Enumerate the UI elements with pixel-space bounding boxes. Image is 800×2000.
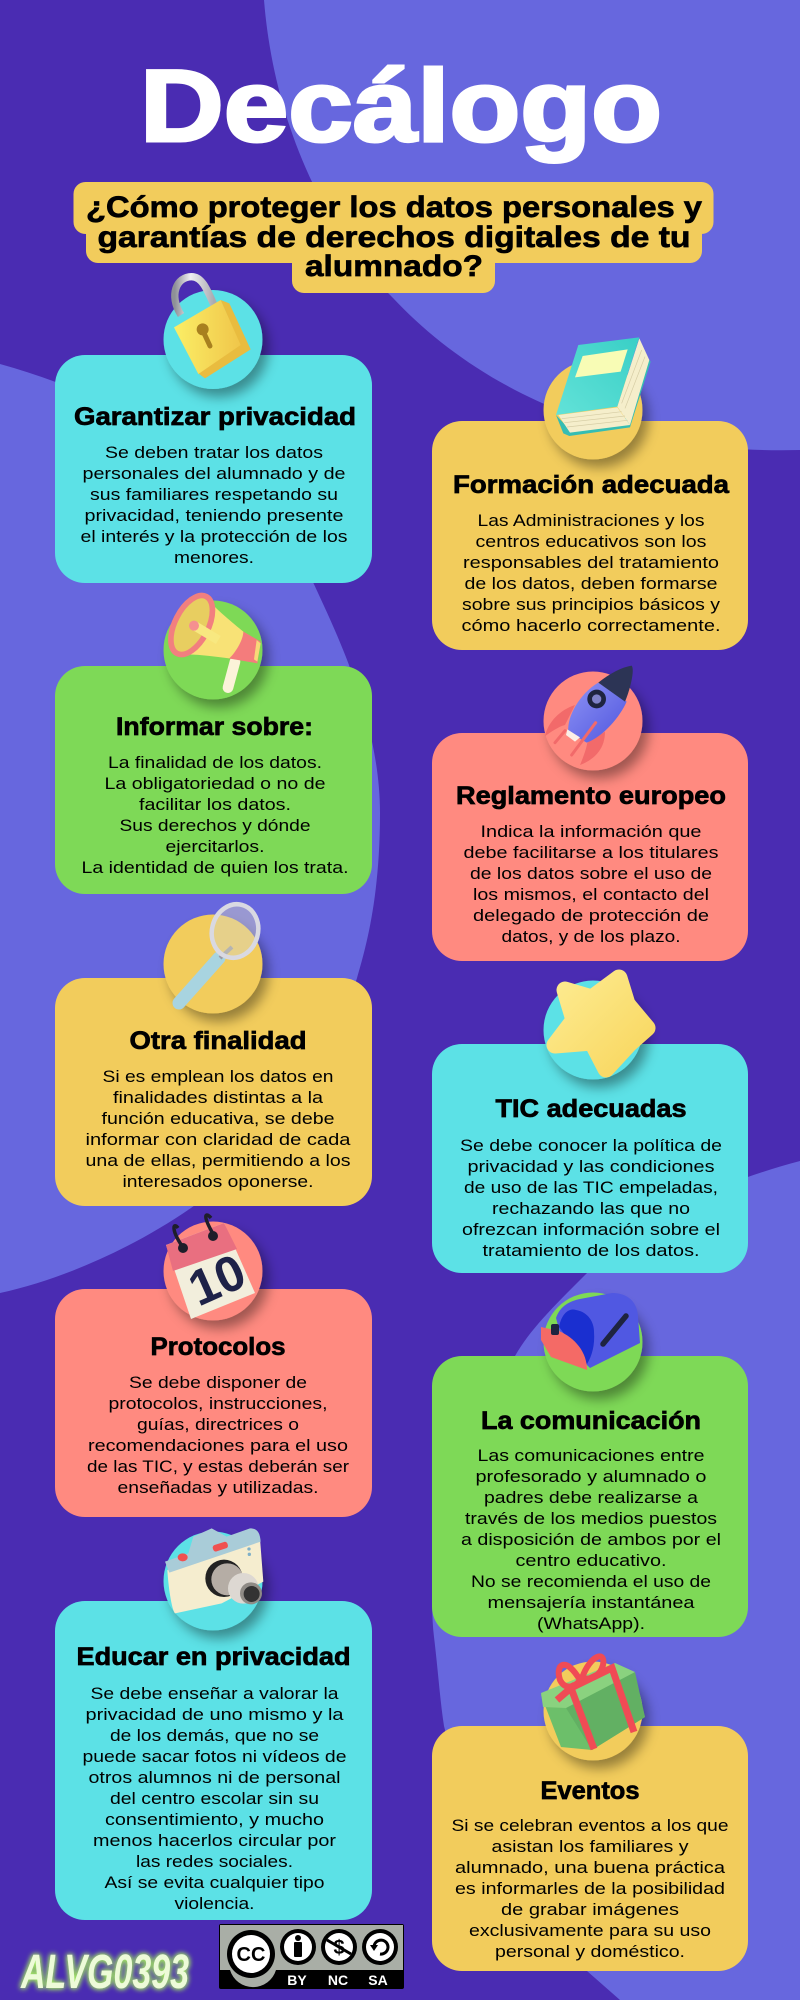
text block: Si es emplean los datos en <box>102 1067 334 1086</box>
text block <box>82 753 348 877</box>
text block: Sus derechos y dónde <box>120 816 310 835</box>
text block <box>462 511 721 635</box>
text block: el interés y la protección de los <box>80 527 348 546</box>
icon: rocket <box>544 666 642 770</box>
creative commons license badge: CC <box>237 1944 265 1966</box>
creative commons license badge <box>219 1924 404 1989</box>
text block: menos hacerlos circular por <box>93 1831 336 1850</box>
text block: Se debe conocer la política de <box>460 1136 722 1155</box>
text block: de los datos, deben formarse <box>464 574 718 593</box>
text block: delegado de protección de <box>473 906 709 925</box>
text block: interesados oponerse. <box>122 1172 314 1191</box>
heading: Reglamento europeo <box>456 782 726 810</box>
text block <box>86 1067 351 1191</box>
text block: Se deben tratar los datos <box>105 443 323 462</box>
text block: rechazando las que no <box>492 1199 690 1218</box>
text block <box>460 1136 722 1260</box>
subtitle: alumnado? <box>305 250 483 283</box>
text block: sobre sus principios básicos y <box>462 595 721 614</box>
text block: del centro escolar sin su <box>110 1789 319 1808</box>
text block: No se recomienda el uso de <box>471 1572 711 1591</box>
text block <box>87 1373 349 1497</box>
text block: privacidad, teniendo presente <box>84 506 344 525</box>
text block: de los datos sobre el uso de <box>470 864 712 883</box>
text block: informar con claridad de cada <box>86 1130 351 1149</box>
heading: Eventos <box>540 1777 640 1805</box>
text block: privacidad y las condiciones <box>468 1157 714 1176</box>
text block <box>80 443 348 567</box>
panel: Otra finalidad <box>55 899 372 1206</box>
text block: través de los medios puestos <box>465 1509 717 1528</box>
text block: violencia. <box>174 1894 254 1913</box>
text block: padres debe realizarse a <box>484 1488 699 1507</box>
creative commons license badge: NC <box>328 1972 348 1988</box>
text block: Indica la información que <box>480 822 702 841</box>
heading: Formación adecuada <box>453 471 730 499</box>
text block: de grabar imágenes <box>501 1900 679 1919</box>
text block: La obligatoriedad o no de <box>104 774 326 793</box>
subtitle: ¿Cómo proteger los datos personales y <box>86 191 702 224</box>
text block: datos, y de los plazo. <box>502 927 680 946</box>
heading: Garantizar privacidad <box>74 403 356 431</box>
icon: gift box <box>541 1656 645 1760</box>
icon: camera <box>164 1528 263 1630</box>
text block: es informarles de la posibilidad <box>455 1879 725 1898</box>
text block: Las Administraciones y los <box>478 511 704 530</box>
icon: calendar: 10 <box>180 1243 254 1317</box>
author signature: ALVG0393 <box>20 1946 189 1999</box>
text block: La identidad de quien los trata. <box>82 858 348 877</box>
text block: finalidades distintas a la <box>113 1088 324 1107</box>
text block: La finalidad de los datos. <box>108 753 322 772</box>
text block: protocolos, instrucciones, <box>108 1394 328 1413</box>
panel: Educar en privacidad <box>55 1528 372 1920</box>
text block: Se debe disponer de <box>129 1373 307 1392</box>
text block: a disposición de ambos por el <box>461 1530 721 1549</box>
heading: Educar en privacidad <box>76 1643 350 1671</box>
subtitle <box>74 182 714 293</box>
text block: las redes sociales. <box>136 1852 293 1871</box>
icon: magnifying glass <box>164 899 264 1014</box>
text block: recomendaciones para el uso <box>88 1436 348 1455</box>
text block <box>464 822 718 946</box>
text block: de las TIC, y estas deberán ser <box>87 1457 349 1476</box>
heading: La comunicación <box>481 1407 701 1435</box>
title: Decálogo <box>140 49 662 163</box>
text block: enseñadas y utilizadas. <box>118 1478 318 1497</box>
icon: mailbox <box>541 1292 642 1392</box>
text block <box>452 1816 728 1961</box>
text block: Si se celebran eventos a los que <box>452 1816 728 1835</box>
panel: Informar sobre <box>55 589 372 894</box>
icon: padlock <box>164 277 262 389</box>
text block: (WhatsApp). <box>537 1614 645 1633</box>
text block: privacidad de uno mismo y la <box>86 1705 344 1724</box>
text block: ejercitarlos. <box>166 837 264 856</box>
text block: otros alumnos ni de personal <box>88 1768 340 1787</box>
text block: centro educativo. <box>516 1551 666 1570</box>
panel: La comunicación <box>432 1292 748 1637</box>
text block: Se debe enseñar a valorar la <box>90 1684 339 1703</box>
heading: Otra finalidad <box>130 1027 306 1055</box>
text block: cómo hacerlo correctamente. <box>462 616 720 635</box>
text block: de los demás, que no se <box>110 1726 319 1745</box>
text block: los mismos, el contacto del <box>473 885 709 904</box>
panel: TIC adecuadas <box>432 978 748 1273</box>
text block: centros educativos son los <box>476 532 706 551</box>
icon: book <box>544 337 651 460</box>
text block: profesorado y alumnado o <box>476 1467 706 1486</box>
text block: personal y doméstico. <box>495 1942 685 1961</box>
text block: debe facilitarse a los titulares <box>464 843 718 862</box>
text block: sus familiares respetando su <box>90 485 338 504</box>
text block: facilitar los datos. <box>139 795 291 814</box>
text block: menores. <box>174 548 254 567</box>
icon: calendar <box>164 1215 262 1320</box>
text block: personales del alumnado y de <box>82 464 346 483</box>
icon: star <box>544 978 647 1080</box>
creative commons license badge: SA <box>368 1972 388 1988</box>
subtitle: garantías de derechos digitales de tu <box>98 221 690 254</box>
text block: mensajería instantánea <box>488 1593 695 1612</box>
text block: Las comunicaciones entre <box>478 1446 704 1465</box>
text block: ofrezcan información sobre el <box>462 1220 720 1239</box>
heading: Protocolos <box>150 1333 286 1361</box>
text block: asistan los familiares y <box>492 1837 689 1856</box>
text block: una de ellas, permitiendo a los <box>86 1151 350 1170</box>
panel: Eventos <box>432 1656 748 1971</box>
heading: TIC adecuadas <box>496 1095 686 1123</box>
panel: Formación adecuada <box>432 337 748 650</box>
panel: Garantizar privacidad <box>55 277 372 583</box>
text block: exclusivamente para su uso <box>469 1921 711 1940</box>
panel: Protocolos <box>55 1215 372 1517</box>
creative commons license badge: BY <box>287 1972 307 1988</box>
text block: puede sacar fotos ni vídeos de <box>82 1747 346 1766</box>
text block: responsables del tratamiento <box>463 553 719 572</box>
text block: función educativa, se debe <box>102 1109 334 1128</box>
text block <box>461 1446 721 1633</box>
panel: Reglamento europeo <box>432 666 748 961</box>
heading: Informar sobre: <box>116 713 313 741</box>
text block: tratamiento de los datos. <box>482 1241 700 1260</box>
text block: Así se evita cualquier tipo <box>104 1873 324 1892</box>
creative commons license badge: $ <box>333 1937 345 1959</box>
text block: consentimiento, y mucho <box>105 1810 324 1829</box>
text block: guías, directrices o <box>137 1415 299 1434</box>
text block <box>82 1684 346 1913</box>
text block: de uso de las TIC empeladas, <box>464 1178 718 1197</box>
icon: megaphone <box>162 589 262 700</box>
text block: alumnado, una buena práctica <box>455 1858 726 1877</box>
